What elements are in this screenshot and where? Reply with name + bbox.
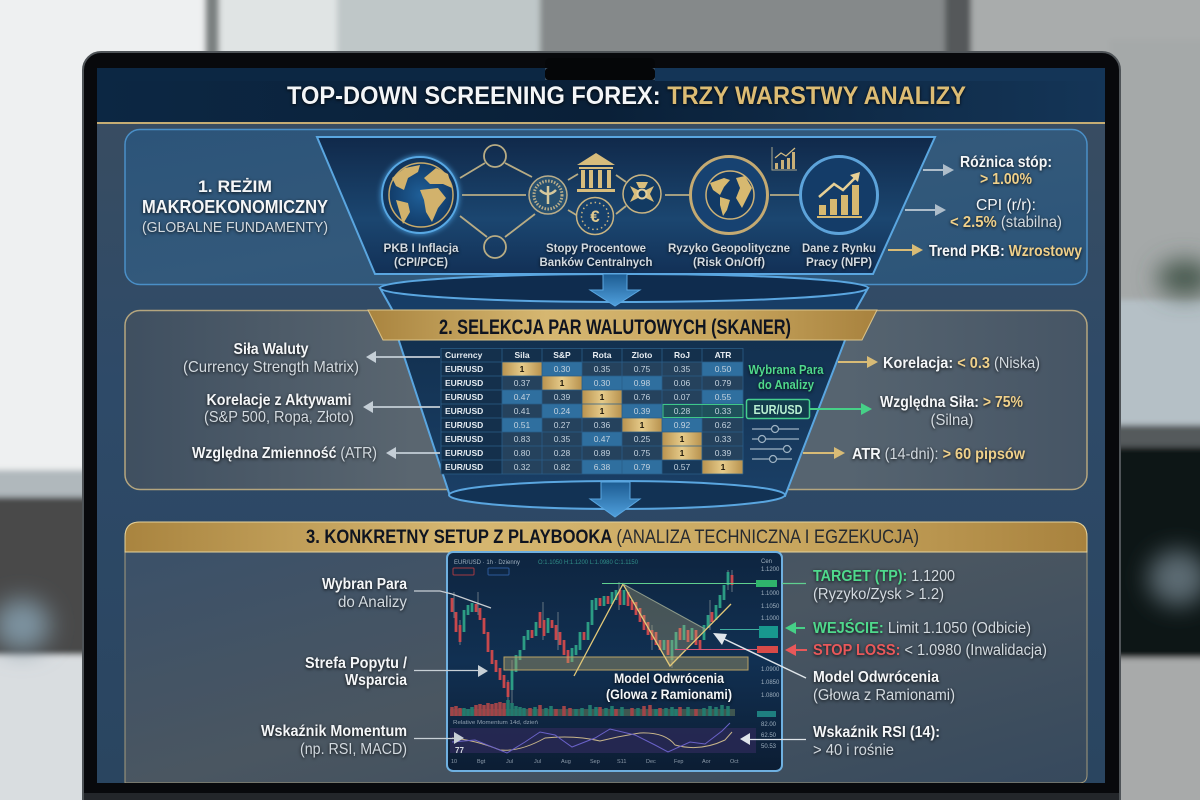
panel 2: pair selection [125,274,1087,509]
scanner table: EUR/USD [445,420,483,430]
screen [97,68,1105,783]
model label: Model Odwrócenia [614,670,724,686]
price axis: 82.00 [761,722,777,728]
time axis: Jul [506,759,513,765]
scanner table: 0.28 [554,448,571,458]
scanner table: EUR/USD [445,406,483,416]
time axis [451,759,739,765]
selection left arrows [363,351,440,459]
gold banner [368,310,877,340]
setup left labels: Wskaźnik Momentum [261,723,407,740]
scanner table: 1 [640,420,645,430]
macro right arrows [888,164,954,256]
scanner table: S&P [553,350,571,360]
selection left labels: Względna Zmienność (ATR) [192,445,377,462]
icon: federal seal [529,176,567,214]
scanner table: 0.39 [634,406,651,416]
RSI indicator: 77 [455,746,464,755]
selection left labels: (S&P 500, Ropa, Złoto) [204,409,354,426]
scanner table: ATR [715,350,731,360]
scanner table: 0.24 [554,406,571,416]
scanner table: 0.92 [674,420,691,430]
scanner table: EUR/USD [445,392,483,402]
scanner table: 0.30 [594,378,611,388]
RSI indicator: Relative Momentum 14d, dzień [453,720,538,726]
scanner table: EUR/USD [445,462,483,472]
scanner table: 0.80 [514,448,531,458]
title: TOP-DOWN SCREENING FOREX: TRZY WARSTWY ANALIZY [287,82,966,110]
macro icon labels: Pracy (NFP) [806,255,872,269]
scanner table: 0.75 [634,364,651,374]
selection right criteria: (Silna) [930,412,974,429]
macro criteria: Trend PKB: Wzrostowy [929,243,1082,260]
volume bars [450,700,735,716]
selection right criteria: Korelacja: < 0.3 (Niska) [883,355,1040,372]
setup left labels: Wsparcia [345,672,407,689]
price axis: 1.1200 [761,567,780,573]
heading: layer 1: 1. REŻIM [198,177,272,196]
setup right labels: WEJŚCIE: Limit 1.1050 (Odbicie) [813,619,1031,637]
gold header [125,522,1087,552]
setup left labels: Strefa Popytu / [305,655,408,672]
scanner table: 6.38 [594,462,611,472]
scanner table: EUR/USD [445,378,483,388]
scanner table: 0.36 [594,420,611,430]
macro criteria: > 1.00% [980,171,1032,188]
time axis: Jul [534,759,541,765]
scanner table: 1 [600,392,605,402]
scanner table: Currency [445,350,483,360]
scanner table: 0.83 [514,434,531,444]
scanner table: 0.30 [554,364,571,374]
icon: globe geopolitics [690,156,768,234]
price axis: 62.50 [761,733,777,739]
reversal pattern [452,584,731,676]
icon: small bar chart [772,147,797,170]
macro criteria: < 2.5% (stabilna) [950,214,1062,231]
scanner table: 0.55 [715,392,732,402]
selection right arrows [803,356,878,459]
selection right criteria: ATR (14-dni): > 60 pipsów [852,446,1026,463]
macro criteria [929,154,1082,260]
heading: layer 1 [142,177,328,236]
price axis: 1.0850 [761,680,780,686]
macro icon labels: Banków Centralnych [540,255,652,269]
icon: euro coin [576,198,614,234]
scanner table: 0.98 [634,378,651,388]
scanner table: RoJ [674,350,690,360]
setup right labels: TARGET (TP): 1.1200 [813,568,955,585]
scanner table: 0.33 [715,406,732,416]
scanner table [441,348,743,474]
panel 1: macro regime [125,130,1087,284]
setup left labels: do Analizy [338,594,407,611]
RSI indicator [450,720,756,755]
selected pair: Wybrana Para [748,363,824,377]
setup right labels [813,568,1047,759]
trading chart [447,552,782,771]
scanner table: Zloto [632,350,652,360]
title bar [97,68,1105,124]
gold header: 3. KONKRETNY SETUP Z PLAYBOOKA (ANALIZA TECHNICZNA I EGZEKUCJA) [306,527,919,548]
scanner table: 0.62 [715,420,732,430]
scanner table: 0.57 [674,462,691,472]
macro icon labels [384,241,876,269]
macro icon labels: Dane z Rynku [802,241,876,255]
scanner table: 0.35 [594,364,611,374]
scanner table: Sila [514,350,530,360]
scanner table: 1 [520,364,525,374]
macro icon labels: Stopy Procentowe [546,241,646,255]
panel 3: concrete setup [125,522,1087,790]
arrow: selection to setup [590,482,640,517]
macro icon labels: Ryzyko Geopolityczne [668,241,790,255]
scanner table: 0.76 [634,392,651,402]
setup right leader lines [713,584,807,745]
time axis: Aug [561,759,571,765]
setup left labels [261,576,408,758]
scanner table: 0.32 [514,462,531,472]
scanner table: 0.41 [514,406,531,416]
scanner table: 0.82 [554,462,571,472]
macro icon labels: (CPI/PCE) [394,255,448,269]
macro icon labels: (Risk On/Off) [693,255,765,269]
scanner table: 0.47 [514,392,531,402]
scanner table: 0.75 [634,448,651,458]
scanner table: 1 [721,462,726,472]
scanner table: Rota [593,350,612,360]
selection right criteria: Względna Siła: > 75% [880,394,1023,411]
time axis: Fep [674,759,683,765]
icon: euro coin: € [590,207,600,226]
model label [606,670,732,702]
icon: eagle seal [623,175,661,213]
candlesticks [452,570,732,706]
time axis: Bgt [477,759,486,765]
scanner table: 0.06 [674,378,691,388]
price axis: Cen [761,559,772,565]
scanner table: EUR/USD [445,434,483,444]
scanner table: 0.25 [634,434,651,444]
scanner table: 1 [680,448,685,458]
icon: growth chart circle [800,156,878,234]
setup left labels: (np. RSI, MACD) [300,741,407,758]
chart header: O:1.1050 H:1.1200 L:1.0980 C:1.1150 [538,559,638,566]
setup right labels: Model Odwrócenia [813,669,939,686]
scanner table: 0.51 [514,420,531,430]
scanner table: 0.79 [715,378,732,388]
network lines [460,145,800,258]
scanner table: 0.35 [674,364,691,374]
price levels [602,580,778,653]
price axis: 1.1050 [761,604,780,610]
selection funnel [397,335,847,509]
scanner table: 0.07 [674,392,691,402]
scanner table: 0.50 [715,364,732,374]
macro funnel [317,137,935,274]
icon: central bank [577,153,615,192]
price axis: 1.1000 [761,591,780,597]
setup right labels: (Ryzyko/Zysk > 1.2) [813,586,944,603]
time axis: 10 [451,759,457,765]
setup right labels: (Głowa z Ramionami) [813,687,955,704]
setup left labels: Wybran Para [322,576,407,593]
selected pair: EUR/USD [754,402,802,417]
setup right labels: STOP LOSS: < 1.0980 (Inwalidacja) [813,642,1047,659]
selected pair: do Analizy [758,378,814,392]
macro criteria: Różnica stóp: [960,154,1052,171]
selection left labels: Siła Waluty [234,341,309,358]
scanner table: 0.35 [554,434,571,444]
selection left labels: (Currency Strength Matrix) [183,359,359,376]
scanner table: 0.89 [594,448,611,458]
price axis: 1.1000 [761,616,780,622]
setup right labels: > 40 i rośnie [813,742,894,759]
scanner table: 0.27 [554,420,571,430]
scanner table: 1 [560,378,565,388]
heading: layer 1: MAKROEKONOMICZNY [142,197,328,217]
lower laptop frame [84,783,1119,793]
scanner table: 1 [600,406,605,416]
price axis: 1.0900 [761,667,780,673]
chart header [453,559,638,575]
selection right criteria [852,355,1040,463]
sliders icon [750,426,799,462]
scanner table: 0.47 [594,434,611,444]
macro criteria: CPI (r/r): [976,197,1036,214]
selected pair [746,363,824,418]
price axis: 50.53 [761,744,777,750]
selection left labels: Korelacje z Aktywami [206,392,352,409]
setup left leader lines [414,591,488,744]
selection left labels [183,341,377,462]
price axis: 1.0800 [761,693,780,699]
scanner table: 0.37 [514,378,531,388]
demand zone [504,657,748,670]
scanner table: 0.33 [715,434,732,444]
setup right labels: Wskaźnik RSI (14): [813,724,940,741]
macro icon labels: PKB I Inflacja [384,241,459,255]
scanner table: EUR/USD [445,448,483,458]
time axis: S11 [617,759,626,765]
scanner table: 0.28 [674,406,691,416]
time axis: Sep [590,759,600,765]
model label: (Glowa z Ramionami) [606,686,732,702]
scanner table: 1 [680,434,685,444]
arrow: macro to selection [590,274,640,306]
time axis: Aor [702,759,711,765]
scanner table: EUR/USD [445,364,483,374]
scanner table: 0.39 [715,448,732,458]
time axis: Oct [730,759,739,765]
scanner table: 0.79 [634,462,651,472]
price axis [757,559,780,750]
icon: globe GDP [381,156,459,234]
scanner table: 0.39 [554,392,571,402]
funnel neck [380,274,868,320]
gold banner: 2. SELEKCJA PAR WALUTOWYCH (SKANER) [439,316,791,339]
heading: layer 1: (GLOBALNE FUNDAMENTY) [142,219,328,236]
chart header: EUR/USD · 1h · Dzienny [454,559,521,566]
time axis: Dec [646,759,656,765]
